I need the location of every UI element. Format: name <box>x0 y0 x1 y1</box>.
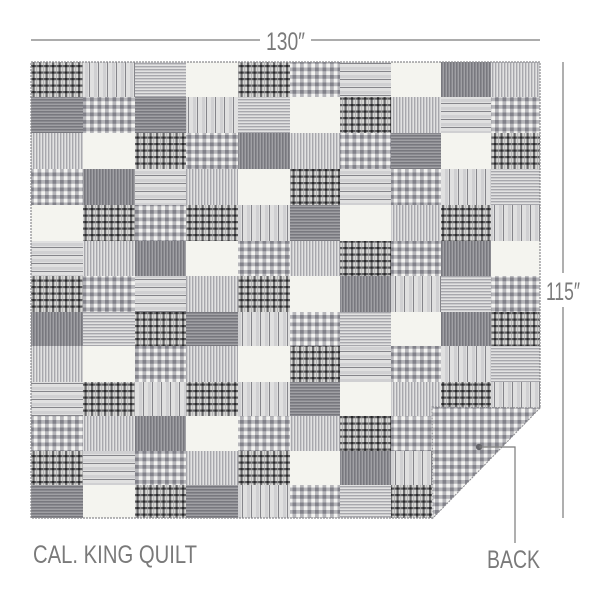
label: back: BACK <box>487 546 540 574</box>
folded corner showing gingham back <box>432 407 540 518</box>
patch row 9 <box>31 346 540 382</box>
callout: back of quilt pointer <box>476 444 515 543</box>
patch row 10 <box>31 382 540 416</box>
width dimension: line and label: 130″ <box>266 28 305 56</box>
patch row 11 <box>31 416 432 451</box>
patch row 13 <box>31 485 432 518</box>
height dimension: line and label: 115″ <box>546 278 580 306</box>
patch row 4 <box>31 169 540 205</box>
patch row 2 <box>31 97 540 133</box>
patch row 6 <box>31 241 540 276</box>
patch row 1 <box>31 62 540 97</box>
quilt top <box>31 62 540 518</box>
quilt scalloped edge binding <box>31 62 540 518</box>
patch row 5 <box>31 205 540 241</box>
patch row 12 <box>31 451 432 485</box>
patch row 3 <box>31 133 540 169</box>
title: quilt size: CAL. KING QUILT <box>33 541 197 569</box>
patch row 7 <box>31 276 540 312</box>
patch row 8 <box>31 312 540 346</box>
